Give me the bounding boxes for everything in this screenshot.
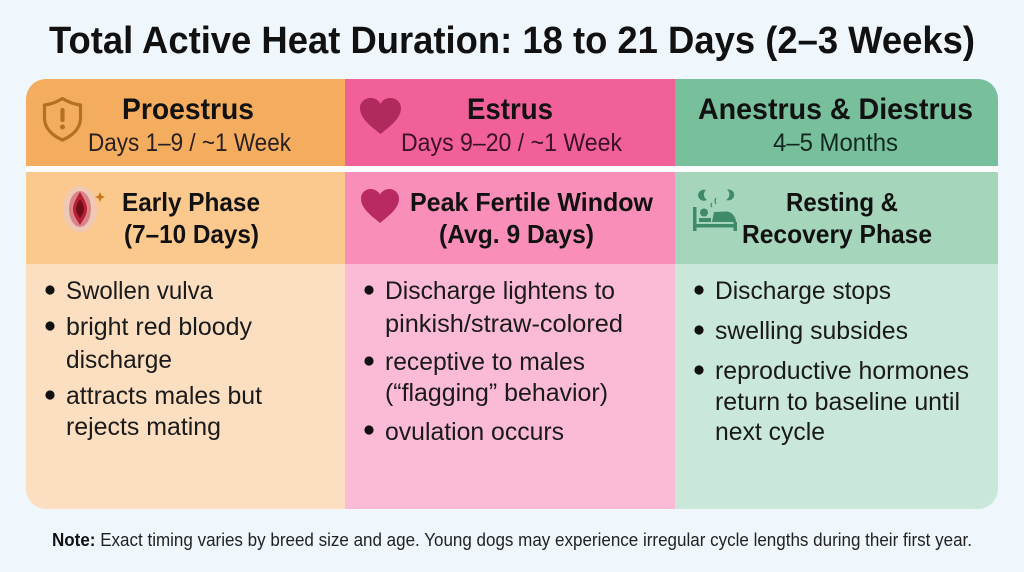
bullet list: proestrus signs: rejects mating	[66, 413, 221, 441]
bullet list: estrus signs: Discharge lightens to	[385, 277, 615, 305]
bullet list: resting signs: return to baseline until	[715, 388, 960, 416]
phase duration: peak fertile window: (Avg. 9 Days)	[439, 219, 594, 249]
bullet list: resting signs	[694, 277, 969, 446]
icon: heart	[360, 98, 401, 134]
phase title: early phase: Early Phase	[122, 187, 260, 217]
footnote: Note: Exact timing varies by breed size and age. Young dogs may experience irregular cycle lengths during their first year.	[52, 530, 972, 550]
phase duration: early phase: (7–10 Days)	[124, 219, 259, 249]
panel: proestrus	[44, 93, 291, 441]
bullet list: estrus signs: pinkish/straw-colored	[385, 310, 623, 338]
bullet list: proestrus signs	[45, 277, 262, 441]
icon: heart small	[361, 189, 399, 223]
icon: warning shield	[44, 98, 80, 140]
heading: estrus: Estrus	[467, 93, 553, 126]
phase title: recovery phase: Recovery Phase	[742, 219, 932, 249]
subheading: proestrus days: Days 1–9 / ~1 Week	[88, 129, 291, 157]
bullet list: proestrus signs: attracts males but	[66, 382, 262, 410]
phase title: resting: Resting &	[786, 187, 898, 217]
panel: anestrus and diestrus	[693, 93, 973, 446]
subheading: anestrus duration: 4–5 Months	[773, 129, 898, 157]
bullet list: estrus signs	[364, 277, 623, 446]
icon: swollen vulva	[63, 186, 105, 232]
bullet list: resting signs: next cycle	[715, 418, 825, 446]
phase title: peak fertile window: Peak Fertile Window	[410, 187, 654, 217]
bullet list: proestrus signs: Swollen vulva	[66, 277, 213, 305]
bullet list: resting signs: Discharge stops	[715, 277, 891, 305]
heading: proestrus: Proestrus	[122, 93, 254, 126]
panel: estrus	[360, 93, 654, 446]
bullet list: proestrus signs: discharge	[66, 346, 172, 374]
bullet list: estrus signs: ovulation occurs	[385, 418, 564, 446]
title: Total Active Heat Duration: 18 to 21 Days (2–3 Weeks)	[49, 20, 975, 62]
bullet list: resting signs: reproductive hormones	[715, 357, 969, 385]
bullet list: resting signs: swelling subsides	[715, 317, 908, 345]
subheading: estrus days: Days 9–20 / ~1 Week	[401, 129, 622, 157]
comparison table	[26, 79, 998, 509]
icon: sleeper in bed	[693, 189, 737, 231]
bullet list: estrus signs: receptive to males	[385, 348, 585, 376]
heading: anestrus and diestrus: Anestrus & Diestrus	[698, 93, 973, 126]
bullet list: estrus signs: (“flagging” behavior)	[385, 379, 608, 407]
bullet list: proestrus signs: bright red bloody	[66, 313, 252, 341]
